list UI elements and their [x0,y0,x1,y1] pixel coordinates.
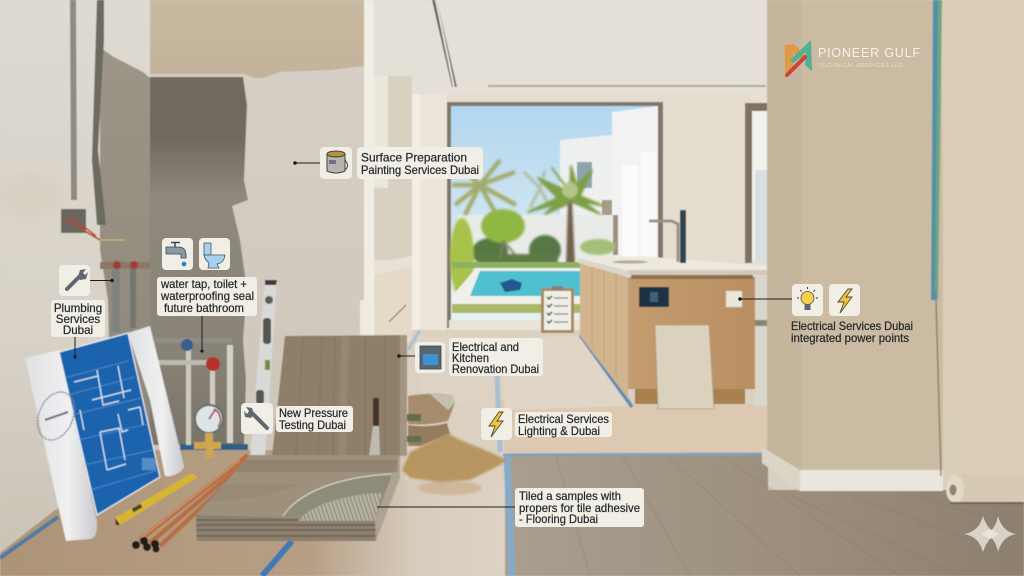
icon: lightning bolt [481,408,512,440]
room background: ceiling and back wall [360,0,770,342]
label text [791,320,913,345]
label text [518,413,609,438]
label text: water tap, toilet + [160,278,247,291]
label text: waterproofing seal [160,290,254,303]
blueprint roll [25,326,184,541]
label text: propers for tile adhesive [519,502,640,515]
label text [452,341,539,376]
label text: Electrical and [452,341,519,354]
side window opening [745,103,767,406]
tile stack with adhesive [196,455,400,541]
wood tile panel [272,335,407,456]
kitchen island [578,210,767,409]
icon: toilet [199,238,230,270]
logo mark [785,40,812,75]
kitchenette cabinet [374,256,412,338]
icon: wrench [241,403,273,434]
icon: wrench [59,265,90,296]
label text: integrated power points [791,332,909,345]
window with garden view [447,102,663,330]
wallpaper and blue tape [931,0,1024,480]
label text [160,278,254,315]
label text: Services [56,313,100,326]
label text: Tiled a samples with [519,490,621,503]
label text: Plumbing [54,302,102,315]
clipboard [541,286,574,333]
copper pipes [132,455,250,552]
sand pile [402,433,507,495]
label text [279,407,348,432]
label text: Painting Services Dubai [361,164,479,177]
label text: Lighting & Dubai [518,425,600,438]
icon: lightning bolt [829,284,860,316]
label text: future bathroom [164,302,244,315]
label text [519,490,640,526]
logo subtitle: TECHNICAL SERVICES LLC [818,63,903,69]
callout: electrical and kitchen renovation [397,338,543,376]
logo text: PIONEER GULF [818,46,920,60]
callout: plumbing services [51,265,114,359]
label text: - Flooring Dubai [519,513,598,526]
label text: Electrical Services [518,413,609,426]
label text: Renovation Dubai [452,363,539,376]
floor base [0,330,1024,576]
callout: water tap, toilet and waterproofing [157,238,257,353]
callout: surface preparation [293,147,483,179]
logo: Pioneer Gulf [785,40,920,75]
label text: New Pressure [279,407,348,420]
label text: Testing Dubai [279,419,346,432]
spirit level upright [250,280,277,458]
icon: water tap [162,238,193,270]
icon: paint can [320,147,352,179]
left wall [0,0,152,553]
label text [361,152,479,177]
icon: oven [415,342,445,373]
plumbing pipes and gauge [100,261,233,458]
callout: tile samples flooring [377,488,644,527]
sparkle watermark [964,516,1016,552]
label text [54,302,102,337]
wallpaper roll [946,475,1024,504]
right pillar [762,0,943,491]
label text: Dubai [63,324,93,337]
callout: electrical services lighting [481,408,612,440]
icon: light bulb [792,284,823,316]
garden plants [450,160,616,298]
label text: Electrical Services Dubai [791,320,913,333]
cement bags [407,394,455,446]
yellow level on floor [115,473,198,525]
centre wall with paint and concrete patch [150,0,374,450]
label text: Kitchen [452,352,489,365]
callout: new pressure testing [241,403,353,434]
label text: Surface Preparation [361,152,467,164]
callout: electrical services integrated power points [738,284,913,345]
